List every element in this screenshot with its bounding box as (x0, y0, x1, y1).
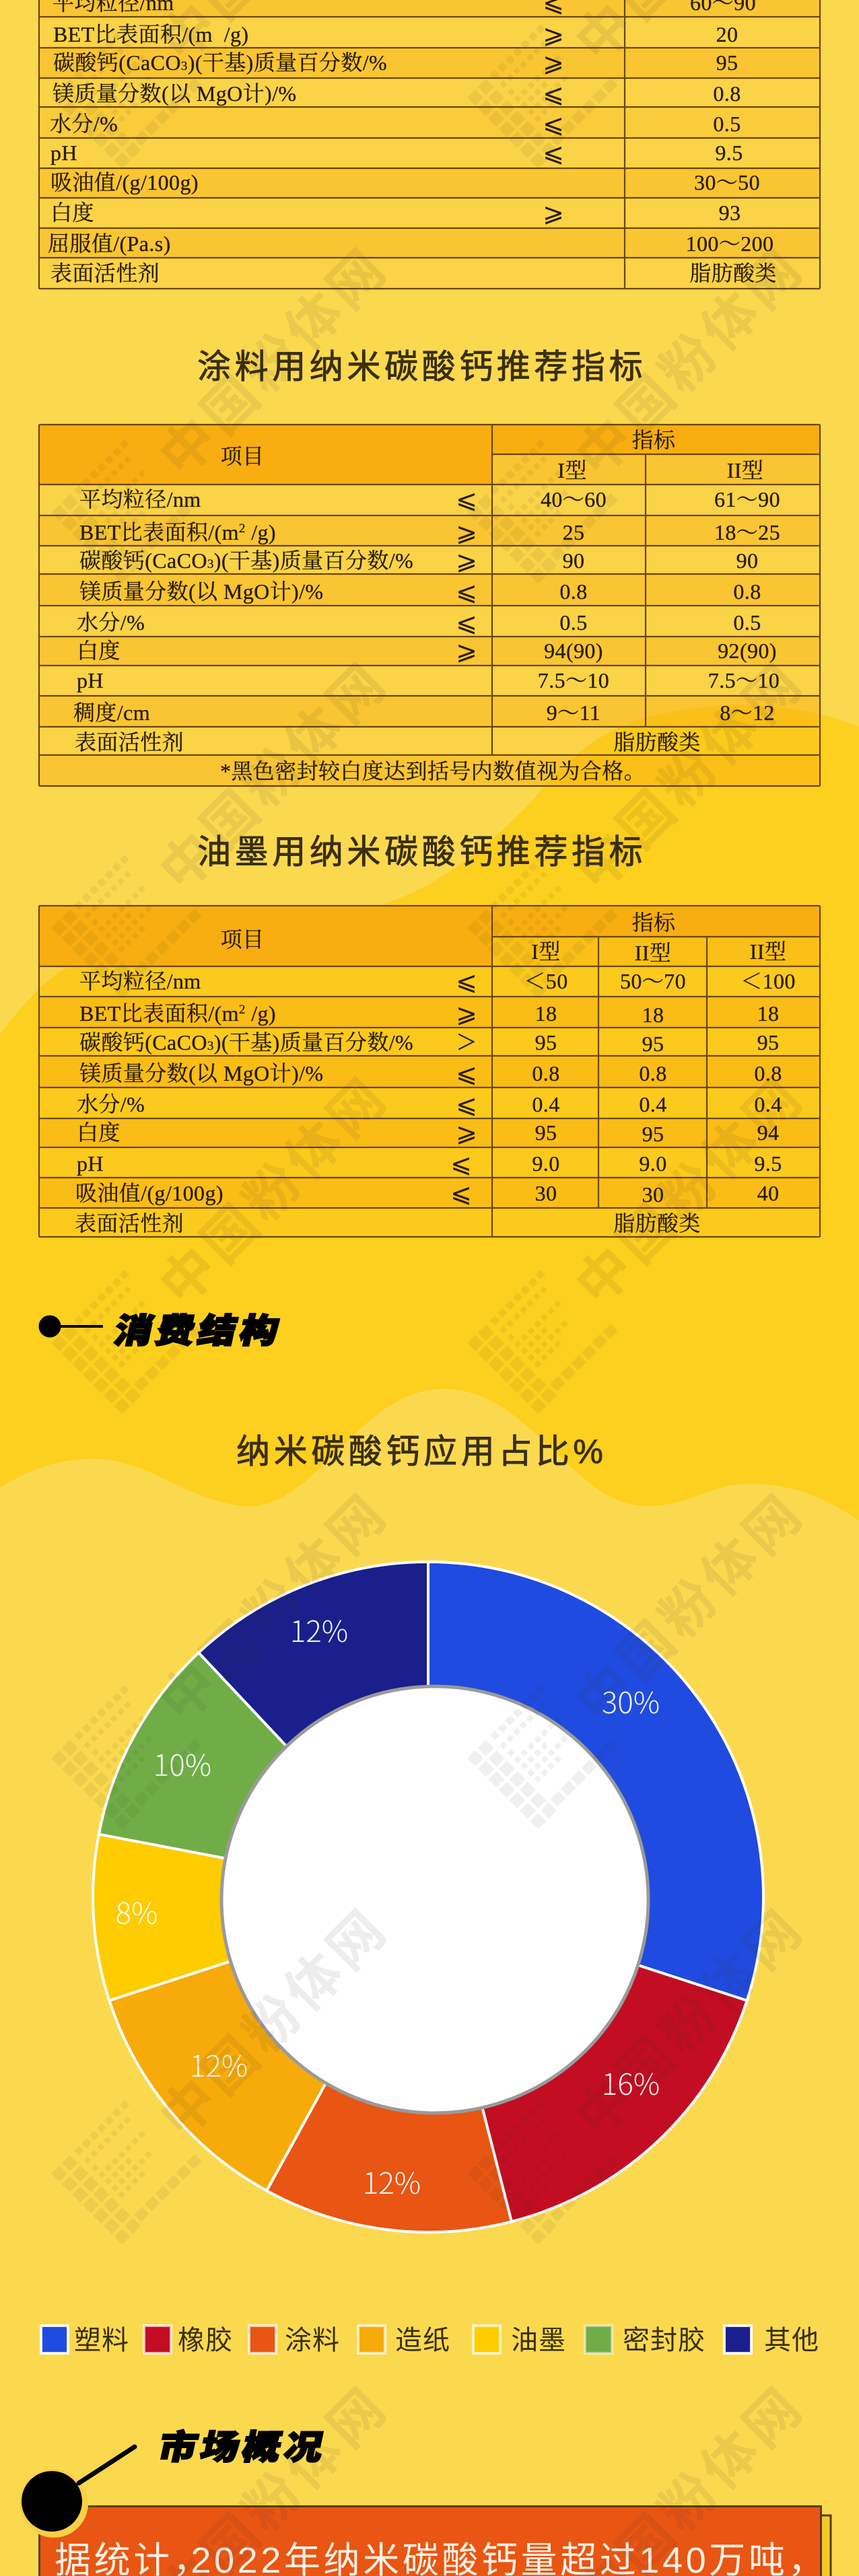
table: 油墨用纳米碳酸钙推荐指标: 95 (535, 1120, 557, 1145)
legend: 油墨 (511, 2326, 566, 2355)
table: 油墨用纳米碳酸钙推荐指标: 脂肪酸类 (613, 1211, 701, 1236)
table: 油墨用纳米碳酸钙推荐指标: ⩽ (450, 1178, 472, 1208)
table: 油墨用纳米碳酸钙推荐指标: 0.4 (754, 1092, 782, 1116)
table: 油墨用纳米碳酸钙推荐指标: 项目 (221, 927, 264, 952)
legend: 涂料 (285, 2326, 340, 2355)
table: 油墨用纳米碳酸钙推荐指标: 50～70 (620, 969, 686, 993)
table: 油墨用纳米碳酸钙推荐指标: 碳酸钙(CaCO3)(干基)质量百分数/% (79, 1030, 413, 1054)
legend: 密封胶 (623, 2326, 706, 2355)
table: 涂料用纳米碳酸钙推荐指标: 白度 (77, 639, 121, 663)
table: 涂料用纳米碳酸钙推荐指标: 40～60 (541, 487, 607, 511)
table: 塑料用纳米碳酸钙指标 (continued): 表面活性剂 (50, 261, 160, 285)
slice: 橡胶 16% (428, 1897, 747, 2221)
table: 油墨用纳米碳酸钙推荐指标: 30 (642, 1182, 664, 1207)
table: 涂料用纳米碳酸钙推荐指标: 0.8 (733, 579, 761, 604)
table: 油墨用纳米碳酸钙推荐指标: 18 (757, 1001, 779, 1026)
watermark: logo and site name, repeated: 中国粉体网 (148, 1065, 400, 1316)
heading: 油墨用纳米碳酸钙推荐指标: 油墨用纳米碳酸钙推荐指标 (197, 833, 646, 871)
table: 油墨用纳米碳酸钙推荐指标: ⩽ (450, 1149, 472, 1178)
watermark: logo and site name, repeated: 中国粉体网 (564, 650, 816, 902)
table: 涂料用纳米碳酸钙推荐指标: 94(90) (544, 639, 603, 663)
watermark: logo and site name, repeated: 中国粉体网 (564, 1896, 816, 2148)
table: 涂料用纳米碳酸钙推荐指标: 90 (736, 548, 758, 573)
table: 塑料用纳米碳酸钙指标 (continued): 0.8 (713, 81, 741, 106)
table: 塑料用纳米碳酸钙指标 (continued): ⩽ (543, 138, 564, 168)
table: 油墨用纳米碳酸钙推荐指标: 2 (239, 1003, 246, 1017)
label: 8%: 8% (115, 1890, 158, 1933)
table: 油墨用纳米碳酸钙推荐指标: 30 (535, 1181, 557, 1205)
watermark: logo and site name, repeated: 中国粉体网 (148, 236, 400, 487)
table: 油墨用纳米碳酸钙推荐指标: 18 (642, 1003, 664, 1027)
table: 塑料用纳米碳酸钙指标 (continued): 20 (716, 22, 738, 46)
table: 塑料用纳米碳酸钙指标 (continued): ⩽ (543, 109, 564, 139)
table: 涂料用纳米碳酸钙推荐指标: BET比表面积/(m (79, 520, 239, 544)
table: 涂料用纳米碳酸钙推荐指标: 2 (239, 522, 246, 536)
table: 涂料用纳米碳酸钙推荐指标: 碳酸钙(CaCO3)(干基)质量百分数/% (79, 548, 413, 573)
label: 12%: 12% (363, 2159, 421, 2203)
slice: 密封胶 10% (99, 1653, 428, 1897)
table: 涂料用纳米碳酸钙推荐指标: 0.5 (733, 610, 761, 635)
chart title: 纳米碳酸钙应用占比%: 纳米碳酸钙应用占比% (236, 1433, 607, 1470)
table: 油墨用纳米碳酸钙推荐指标: ⩽ (456, 966, 477, 996)
label: 12%: 12% (290, 1608, 348, 1651)
donut hole (221, 1686, 648, 2113)
label: 12%: 12% (190, 2042, 248, 2085)
table: 涂料用纳米碳酸钙推荐指标 (39, 425, 820, 786)
table: 油墨用纳米碳酸钙推荐指标: ⩾ (456, 999, 477, 1028)
table: 塑料用纳米碳酸钙指标 (continued): 100～200 (686, 231, 774, 256)
table: 油墨用纳米碳酸钙推荐指标: pH (77, 1151, 104, 1176)
table: 油墨用纳米碳酸钙推荐指标: II型 (635, 941, 671, 965)
table: 油墨用纳米碳酸钙推荐指标: ＜100 (741, 969, 796, 993)
table: 涂料用纳米碳酸钙推荐指标: 92(90) (718, 639, 777, 663)
table: 塑料用纳米碳酸钙指标 (continued): ⩽ (543, 79, 564, 108)
table: 涂料用纳米碳酸钙推荐指标: 9～11 (547, 701, 600, 725)
table: 涂料用纳米碳酸钙推荐指标: 25 (563, 520, 584, 544)
slice: 其他 12% (199, 1562, 428, 1897)
watermark: logo and site name, repeated: 中国粉体网 (564, 1481, 816, 1733)
table: 涂料用纳米碳酸钙推荐指标: 指标 (632, 428, 676, 452)
slice: 造纸 12% (109, 1897, 428, 2190)
table: 塑料用纳米碳酸钙指标 (continued): BET比表面积/(m /g) (53, 22, 248, 46)
table: 油墨用纳米碳酸钙推荐指标: ⩾ (456, 1118, 477, 1147)
table: 塑料用纳米碳酸钙指标 (continued): 脂肪酸类 (689, 261, 777, 285)
table: 塑料用纳米碳酸钙指标 (continued): pH (50, 141, 77, 165)
table: 塑料用纳米碳酸钙指标 (continued): ⩾ (543, 20, 564, 49)
slice: 涂料 12% (267, 1897, 512, 2232)
table: 油墨用纳米碳酸钙推荐指标: 水分/% (77, 1092, 145, 1116)
table: 油墨用纳米碳酸钙推荐指标: 95 (642, 1122, 664, 1146)
table: 塑料用纳米碳酸钙指标 (continued): 碳酸钙(CaCO3)(干基)质量百分数/% (53, 50, 387, 75)
table: 涂料用纳米碳酸钙推荐指标: pH (77, 668, 104, 692)
table: 涂料用纳米碳酸钙推荐指标: 8～12 (720, 701, 775, 725)
table: 涂料用纳米碳酸钙推荐指标: ⩽ (456, 608, 477, 637)
table: 油墨用纳米碳酸钙推荐指标: 95 (535, 1030, 557, 1054)
table: 塑料用纳米碳酸钙指标 (continued): 9.5 (715, 141, 743, 165)
donut chart: application share (93, 1562, 763, 2232)
table: 涂料用纳米碳酸钙推荐指标: *黑色密封较白度达到括号内数值视为合格。 (220, 759, 646, 783)
table: 油墨用纳米碳酸钙推荐指标: 吸油值/(g/100g) (75, 1181, 224, 1205)
legend (41, 2326, 819, 2355)
table: 塑料用纳米碳酸钙指标 (continued): 白度 (50, 201, 94, 225)
table: 塑料用纳米碳酸钙指标 (continued) (39, 0, 820, 289)
table: 涂料用纳米碳酸钙推荐指标: ⩽ (456, 577, 477, 606)
slice: 塑料 30% (428, 1562, 763, 2001)
table: 塑料用纳米碳酸钙指标 (continued): 镁质量分数(以 MgO计)/% (53, 81, 296, 106)
label: 10%: 10% (153, 1742, 211, 1785)
label: 16%: 16% (602, 2061, 660, 2104)
table: 油墨用纳米碳酸钙推荐指标: 95 (757, 1030, 779, 1054)
table: 油墨用纳米碳酸钙推荐指标: ＞ (456, 1030, 477, 1055)
table: 塑料用纳米碳酸钙指标 (continued): 30～50 (694, 170, 760, 194)
table: 涂料用纳米碳酸钙推荐指标: 镁质量分数(以 MgO计)/% (79, 579, 323, 604)
table: 油墨用纳米碳酸钙推荐指标: 40 (757, 1181, 779, 1205)
table: 塑料用纳米碳酸钙指标 (continued): 屈服值/(Pa.s) (48, 231, 171, 256)
table: 塑料用纳米碳酸钙指标 (continued): 0.5 (713, 112, 741, 136)
text panel: market overview (39, 2506, 831, 2576)
table: 油墨用纳米碳酸钙推荐指标: 0.4 (532, 1092, 560, 1116)
watermark: logo and site name, repeated: 中国粉体网 (148, 1481, 400, 1733)
table: 涂料用纳米碳酸钙推荐指标: 脂肪酸类 (613, 730, 701, 754)
heading: 涂料用纳米碳酸钙推荐指标: 涂料用纳米碳酸钙推荐指标 (197, 348, 646, 386)
section heading: 消费结构: 消费结构 (111, 1312, 286, 1350)
table: 涂料用纳米碳酸钙推荐指标: /g) (246, 520, 276, 544)
table: 涂料用纳米碳酸钙推荐指标: 7.5～10 (538, 668, 609, 692)
watermark: logo and site name, repeated: 中国粉体网 (564, 236, 816, 487)
table: 涂料用纳米碳酸钙推荐指标: 稠度/cm (73, 701, 150, 725)
table: 涂料用纳米碳酸钙推荐指标: 0.8 (559, 579, 588, 604)
watermark: logo and site name, repeated: 中国粉体网 (148, 650, 400, 902)
table: 涂料用纳米碳酸钙推荐指标: ⩾ (456, 517, 477, 547)
table: 涂料用纳米碳酸钙推荐指标: 平均粒径/nm (79, 487, 201, 511)
table: 油墨用纳米碳酸钙推荐指标: 9.0 (532, 1151, 560, 1176)
table: 油墨用纳米碳酸钙推荐指标: 平均粒径/nm (79, 969, 201, 993)
table: 油墨用纳米碳酸钙推荐指标: 9.5 (754, 1151, 782, 1176)
legend: 其他 (764, 2326, 819, 2355)
table: 涂料用纳米碳酸钙推荐指标: II型 (727, 458, 763, 482)
table: 涂料用纳米碳酸钙推荐指标: I型 (557, 458, 587, 482)
table: 涂料用纳米碳酸钙推荐指标: ⩾ (456, 636, 477, 666)
panel body (39, 2506, 821, 2576)
table: 涂料用纳米碳酸钙推荐指标: 90 (563, 548, 584, 573)
table: 涂料用纳米碳酸钙推荐指标: 项目 (221, 444, 264, 468)
table: 油墨用纳米碳酸钙推荐指标: /g) (246, 1001, 276, 1026)
legend: 橡胶 (178, 2326, 233, 2355)
background: darker yellow wave band (0, 705, 859, 1521)
legend: 造纸 (395, 2326, 450, 2355)
table: 油墨用纳米碳酸钙推荐指标: BET比表面积/(m (79, 1001, 239, 1026)
table: 油墨用纳米碳酸钙推荐指标: 95 (642, 1032, 664, 1056)
section heading: 市场概况: 市场概况 (156, 2429, 331, 2466)
table: 油墨用纳米碳酸钙推荐指标: I型 (531, 939, 561, 964)
table: 油墨用纳米碳酸钙推荐指标: 0.8 (639, 1061, 667, 1085)
table: 油墨用纳米碳酸钙推荐指标: 0.8 (532, 1061, 560, 1085)
legend: 塑料 (74, 2326, 129, 2355)
slice: 油墨 8% (93, 1834, 428, 2001)
table: 涂料用纳米碳酸钙推荐指标: 水分/% (77, 610, 145, 635)
label: 30%: 30% (602, 1679, 660, 1722)
table: 油墨用纳米碳酸钙推荐指标: ⩽ (456, 1059, 477, 1088)
table: 塑料用纳米碳酸钙指标 (continued): 95 (716, 50, 738, 75)
table: 油墨用纳米碳酸钙推荐指标: 镁质量分数(以 MgO计)/% (79, 1061, 323, 1085)
watermark: logo and site name, repeated: 中国粉体网 (148, 1896, 400, 2148)
table: 涂料用纳米碳酸钙推荐指标: 61～90 (714, 487, 780, 511)
table: 油墨用纳米碳酸钙推荐指标: 表面活性剂 (75, 1211, 184, 1236)
table: 涂料用纳米碳酸钙推荐指标: ⩽ (456, 485, 477, 514)
table: 塑料用纳米碳酸钙指标 (continued): ⩾ (543, 198, 564, 227)
table: 塑料用纳米碳酸钙指标 (continued): ⩾ (543, 48, 564, 77)
section heading: 市场概况 (20, 2429, 331, 2538)
table: 油墨用纳米碳酸钙推荐指标: ⩽ (456, 1089, 477, 1119)
table: 油墨用纳米碳酸钙推荐指标: ＜50 (524, 969, 568, 993)
watermark: logo and site name, repeated: 中国粉体网 (564, 1065, 816, 1316)
table: 油墨用纳米碳酸钙推荐指标: 18 (535, 1001, 557, 1026)
table: 涂料用纳米碳酸钙推荐指标: 0.5 (559, 610, 588, 635)
table: 涂料用纳米碳酸钙推荐指标: ⩾ (456, 546, 477, 575)
table: 涂料用纳米碳酸钙推荐指标: 7.5～10 (708, 668, 780, 692)
table: 塑料用纳米碳酸钙指标 (continued): 93 (719, 201, 741, 225)
table: 油墨用纳米碳酸钙推荐指标: 0.8 (754, 1061, 782, 1085)
table: 涂料用纳米碳酸钙推荐指标: 表面活性剂 (75, 730, 184, 754)
table: 塑料用纳米碳酸钙指标 (continued): 水分/% (50, 112, 118, 136)
table: 油墨用纳米碳酸钙推荐指标: 94 (757, 1120, 779, 1145)
panel back frame (808, 2515, 831, 2576)
table: 油墨用纳米碳酸钙推荐指标: II型 (750, 939, 786, 964)
table: 油墨用纳米碳酸钙推荐指标 (39, 906, 820, 1237)
table: 涂料用纳米碳酸钙推荐指标: 18～25 (714, 520, 780, 544)
table: 油墨用纳米碳酸钙推荐指标: 0.4 (639, 1092, 667, 1116)
table: 油墨用纳米碳酸钙推荐指标: 9.0 (639, 1151, 667, 1176)
table: 油墨用纳米碳酸钙推荐指标: 指标 (632, 910, 676, 935)
table: 塑料用纳米碳酸钙指标 (continued): 吸油值/(g/100g) (50, 170, 199, 194)
table: 油墨用纳米碳酸钙推荐指标: 白度 (77, 1120, 121, 1145)
